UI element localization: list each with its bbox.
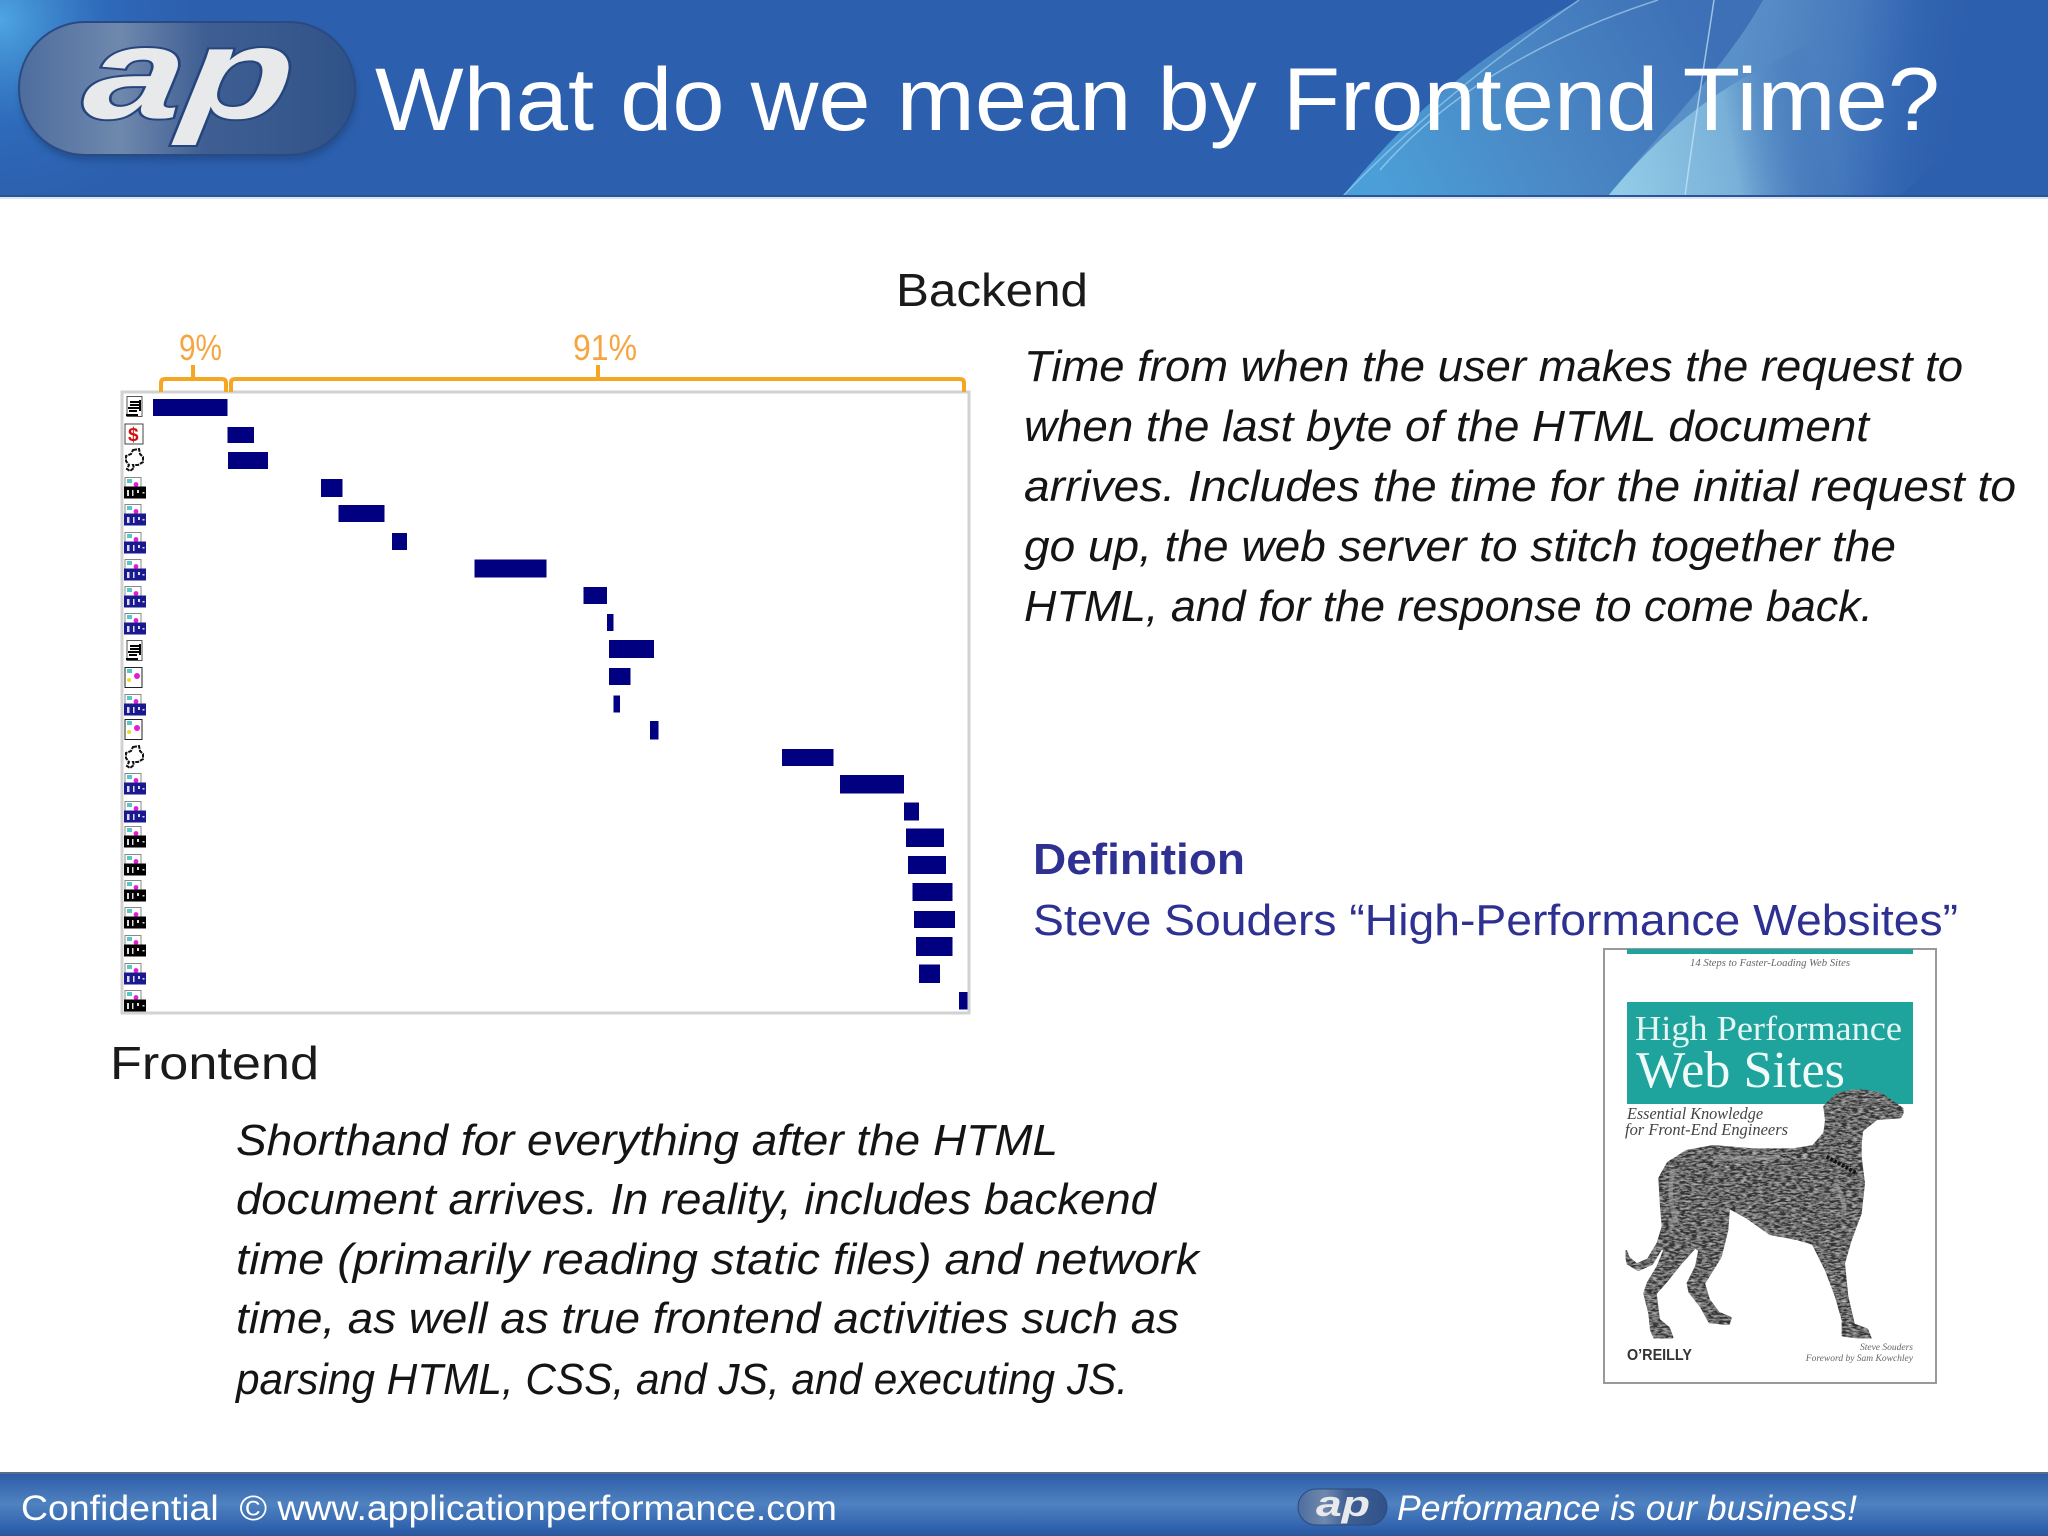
- request bars: [153, 399, 968, 1010]
- book cover: O’REILLY: [1627, 1347, 1693, 1364]
- heading: Frontend: Frontend: [110, 1037, 319, 1089]
- book title block: High Performance: [1635, 1009, 1902, 1048]
- frontend description: document arrives. In reality, includes backend: [236, 1175, 1158, 1224]
- definition: [1033, 835, 1958, 945]
- definition: Steve Souders “High-Performance Websites”: [1033, 896, 1958, 945]
- bracket: 91% frontend: 91%: [573, 327, 637, 368]
- book cover: 14 Steps to Faster-Loading Web Sites: [1690, 958, 1850, 969]
- footer tagline: Performance is our business!: [1397, 1489, 1857, 1528]
- backend description: Time from when the user makes the request to: [1024, 342, 1963, 391]
- logo: ap: [19, 1, 357, 161]
- backend description: go up, the web server to stitch together the: [1024, 522, 1896, 571]
- frontend description: parsing HTML, CSS, and JS, and executing JS.: [234, 1355, 1128, 1404]
- bracket: 91% frontend: [231, 327, 964, 392]
- book title block: Web Sites: [1636, 1042, 1845, 1099]
- footer confidentiality text: Confidential © www.applicationperformance.com: [21, 1489, 837, 1528]
- bracket: 9% backend: 9%: [179, 327, 222, 368]
- resource type icons: $: [128, 425, 139, 446]
- backend description: when the last byte of the HTML document: [1024, 402, 1871, 451]
- title: What do we mean by Frontend Time?: [375, 49, 1940, 149]
- book cover: for Front-End Engineers: [1625, 1120, 1788, 1139]
- backend description: HTML, and for the response to come back.: [1024, 582, 1873, 631]
- waterfall chart: [122, 327, 969, 1013]
- frontend description: [234, 1116, 1201, 1404]
- book cover: Steve Souders: [1860, 1343, 1913, 1353]
- footer logo: ap: [1316, 1483, 1370, 1524]
- resource type icons: [124, 396, 146, 1012]
- header band: [0, 0, 2048, 199]
- bracket: 9% backend: [161, 327, 226, 392]
- frontend description: Shorthand for everything after the HTML: [236, 1116, 1058, 1165]
- footer logo: [1298, 1483, 1387, 1525]
- definition: Definition: [1033, 835, 1245, 884]
- backend description: [1024, 342, 2016, 631]
- backend description: arrives. Includes the time for the initial request to: [1024, 462, 2016, 511]
- book cover: [1604, 949, 1936, 1383]
- logo: ap: ap: [77, 1, 304, 146]
- chart frame: [122, 392, 969, 1013]
- frontend description: time, as well as true frontend activities such as: [236, 1294, 1179, 1343]
- book cover: Essential Knowledge: [1626, 1104, 1763, 1123]
- frontend description: time (primarily reading static files) and network: [236, 1235, 1201, 1284]
- book title block: [1627, 1002, 1913, 1104]
- book cover: Foreword by Sam Kowchley: [1805, 1354, 1914, 1364]
- heading: Backend: Backend: [896, 264, 1088, 316]
- greyhound illustration: [1626, 1090, 1903, 1338]
- footer band: [0, 1472, 2048, 1536]
